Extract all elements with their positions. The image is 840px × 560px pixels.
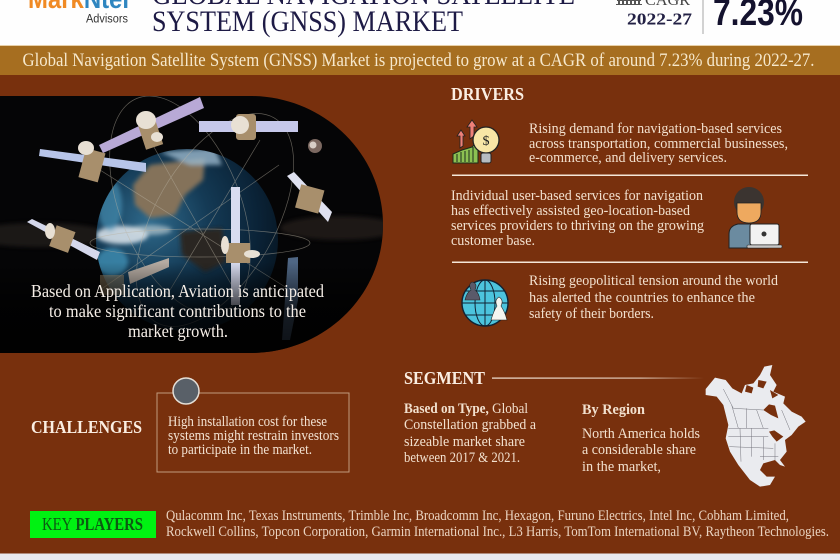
text: safety of their borders. xyxy=(529,306,654,322)
text: has alerted the countries to enhance the xyxy=(529,290,755,306)
badge xyxy=(30,511,156,538)
logo: MarkNtel Advisors xyxy=(28,0,129,26)
map: North America xyxy=(706,365,806,487)
text: Rising demand for navigation-based services xyxy=(529,121,782,137)
heading: drivers: DRIVERS xyxy=(451,84,524,104)
segment by region xyxy=(582,402,700,475)
segment by region: North America holds xyxy=(582,426,700,442)
CAGR period: 2022-27 xyxy=(627,10,693,28)
moon xyxy=(308,139,322,153)
badge: KEY PLAYERS xyxy=(42,514,143,534)
text: services providers to thriving on the growing xyxy=(451,218,704,234)
icon: growth bulb xyxy=(453,120,499,163)
key players xyxy=(30,508,829,540)
lower shade xyxy=(100,264,369,353)
text xyxy=(529,121,788,166)
driver 2 xyxy=(451,187,782,249)
icon: growth bulb: $ xyxy=(482,134,490,149)
segment by type: Based on Type, Global xyxy=(404,401,528,417)
photo caption: to make significant contributions to the xyxy=(49,301,306,321)
text box: systems might restrain investors xyxy=(168,428,339,444)
title: SYSTEM (GNSS) MARKET xyxy=(152,5,463,38)
panel: satellite photo xyxy=(0,96,383,353)
challenges xyxy=(31,378,349,472)
segment xyxy=(404,365,806,487)
segment by type: sizeable market share xyxy=(404,434,525,450)
text: e-commerce, and delivery services. xyxy=(529,150,727,166)
orbit lines xyxy=(90,96,310,327)
summary band xyxy=(0,45,840,75)
text box: High installation cost for these xyxy=(168,414,327,430)
segment by type xyxy=(404,401,536,466)
driver 3 xyxy=(462,273,778,326)
icon: circle badge xyxy=(173,378,199,404)
earth xyxy=(96,148,278,331)
text xyxy=(451,188,704,249)
photo caption: market growth. xyxy=(128,321,228,341)
text: customer base. xyxy=(451,233,535,249)
logo: MarkNtel Advisors: Advisors xyxy=(86,14,128,26)
segment by region: in the market, xyxy=(582,459,661,475)
segment by type: Constellation grabbed a xyxy=(404,417,536,433)
companies xyxy=(166,508,829,540)
text xyxy=(529,273,778,322)
text: has effectively assisted geo-location-based xyxy=(451,203,690,219)
photo caption: Based on Application, Aviation is anticipated xyxy=(31,281,324,301)
driver 1 xyxy=(453,120,788,166)
text box: to participate in the market. xyxy=(168,442,312,458)
header xyxy=(0,0,840,45)
text box xyxy=(157,393,349,472)
CAGR period xyxy=(616,0,693,28)
segment by region: a considerable share xyxy=(582,442,696,458)
footer strip xyxy=(0,554,840,560)
segment by type: between 2017 & 2021. xyxy=(404,450,520,466)
photo caption xyxy=(31,281,324,341)
heading: segment: SEGMENT xyxy=(404,368,485,388)
icon: globe with chess pieces xyxy=(462,280,508,326)
text: Rising geopolitical tension around the world xyxy=(529,273,778,289)
text: across transportation, commercial businesses, xyxy=(529,136,788,152)
text: Individual user-based services for navigation xyxy=(451,188,703,204)
satellites xyxy=(27,97,332,340)
heading: challenges: CHALLENGES xyxy=(31,417,142,437)
icon: person with laptop xyxy=(729,187,782,248)
segment by region: By Region xyxy=(582,402,646,418)
